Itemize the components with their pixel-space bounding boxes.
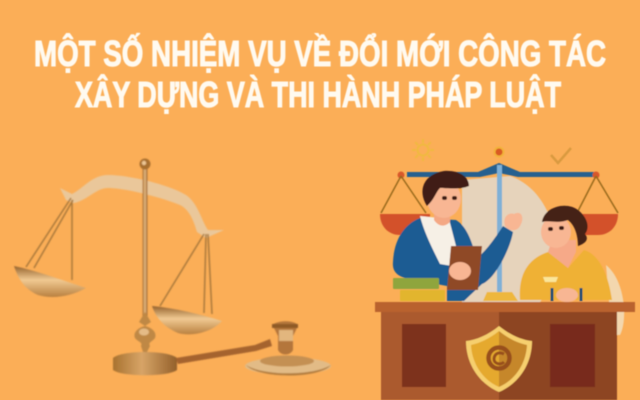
woman hands <box>556 288 578 302</box>
backdrop arc on right <box>606 265 624 335</box>
balance left end <box>398 172 404 178</box>
post ornament <box>134 312 156 352</box>
books <box>393 278 445 301</box>
clipboard <box>447 246 482 290</box>
desk left body <box>381 311 499 400</box>
beige backdrop circle <box>462 176 556 302</box>
desk top <box>375 302 635 312</box>
sound block <box>245 358 331 374</box>
left balance pan <box>380 214 430 235</box>
desk right panel <box>550 324 595 387</box>
right balance pan <box>580 214 618 235</box>
man raised hand <box>504 213 522 230</box>
man jacket <box>393 218 513 301</box>
title <box>34 31 606 115</box>
left pan strings <box>26 198 73 280</box>
man head <box>427 180 461 218</box>
scale post <box>142 168 148 318</box>
balance stand base <box>483 292 518 301</box>
woman head <box>541 216 571 248</box>
icon: sun gear <box>412 139 434 161</box>
gavel head <box>272 321 298 354</box>
woman hair <box>542 206 588 246</box>
shield <box>466 326 532 392</box>
scale beam <box>60 175 224 238</box>
woman eyes <box>550 228 562 229</box>
paper on table <box>543 277 558 282</box>
woman body <box>520 250 612 300</box>
man hand on clipboard <box>449 262 471 280</box>
man <box>393 171 522 301</box>
man hair <box>422 171 469 206</box>
gavel handle <box>176 339 272 364</box>
desk <box>375 302 635 400</box>
post finial <box>140 158 150 170</box>
right pan strings <box>160 234 212 314</box>
icon: check mark <box>551 148 571 163</box>
man neck <box>434 205 450 226</box>
illustration: golden scales of justice <box>14 158 331 376</box>
woman <box>520 206 612 302</box>
desk right body <box>499 311 617 400</box>
desk left panel <box>402 324 446 387</box>
woman sleeves <box>552 288 581 301</box>
copyright emblem <box>488 348 510 368</box>
icon: top star <box>494 148 504 156</box>
balance right end <box>592 172 600 178</box>
left pan <box>14 266 86 297</box>
illustration: two people at a law desk <box>375 139 635 400</box>
balance pole <box>497 165 502 293</box>
right pan <box>152 306 222 334</box>
man shirt <box>420 216 456 266</box>
right chains <box>577 176 618 213</box>
scale base <box>113 352 177 375</box>
left chains <box>381 176 426 213</box>
man eyes and mouth <box>444 196 455 200</box>
balance beam <box>407 163 596 177</box>
woman neck <box>548 240 576 268</box>
